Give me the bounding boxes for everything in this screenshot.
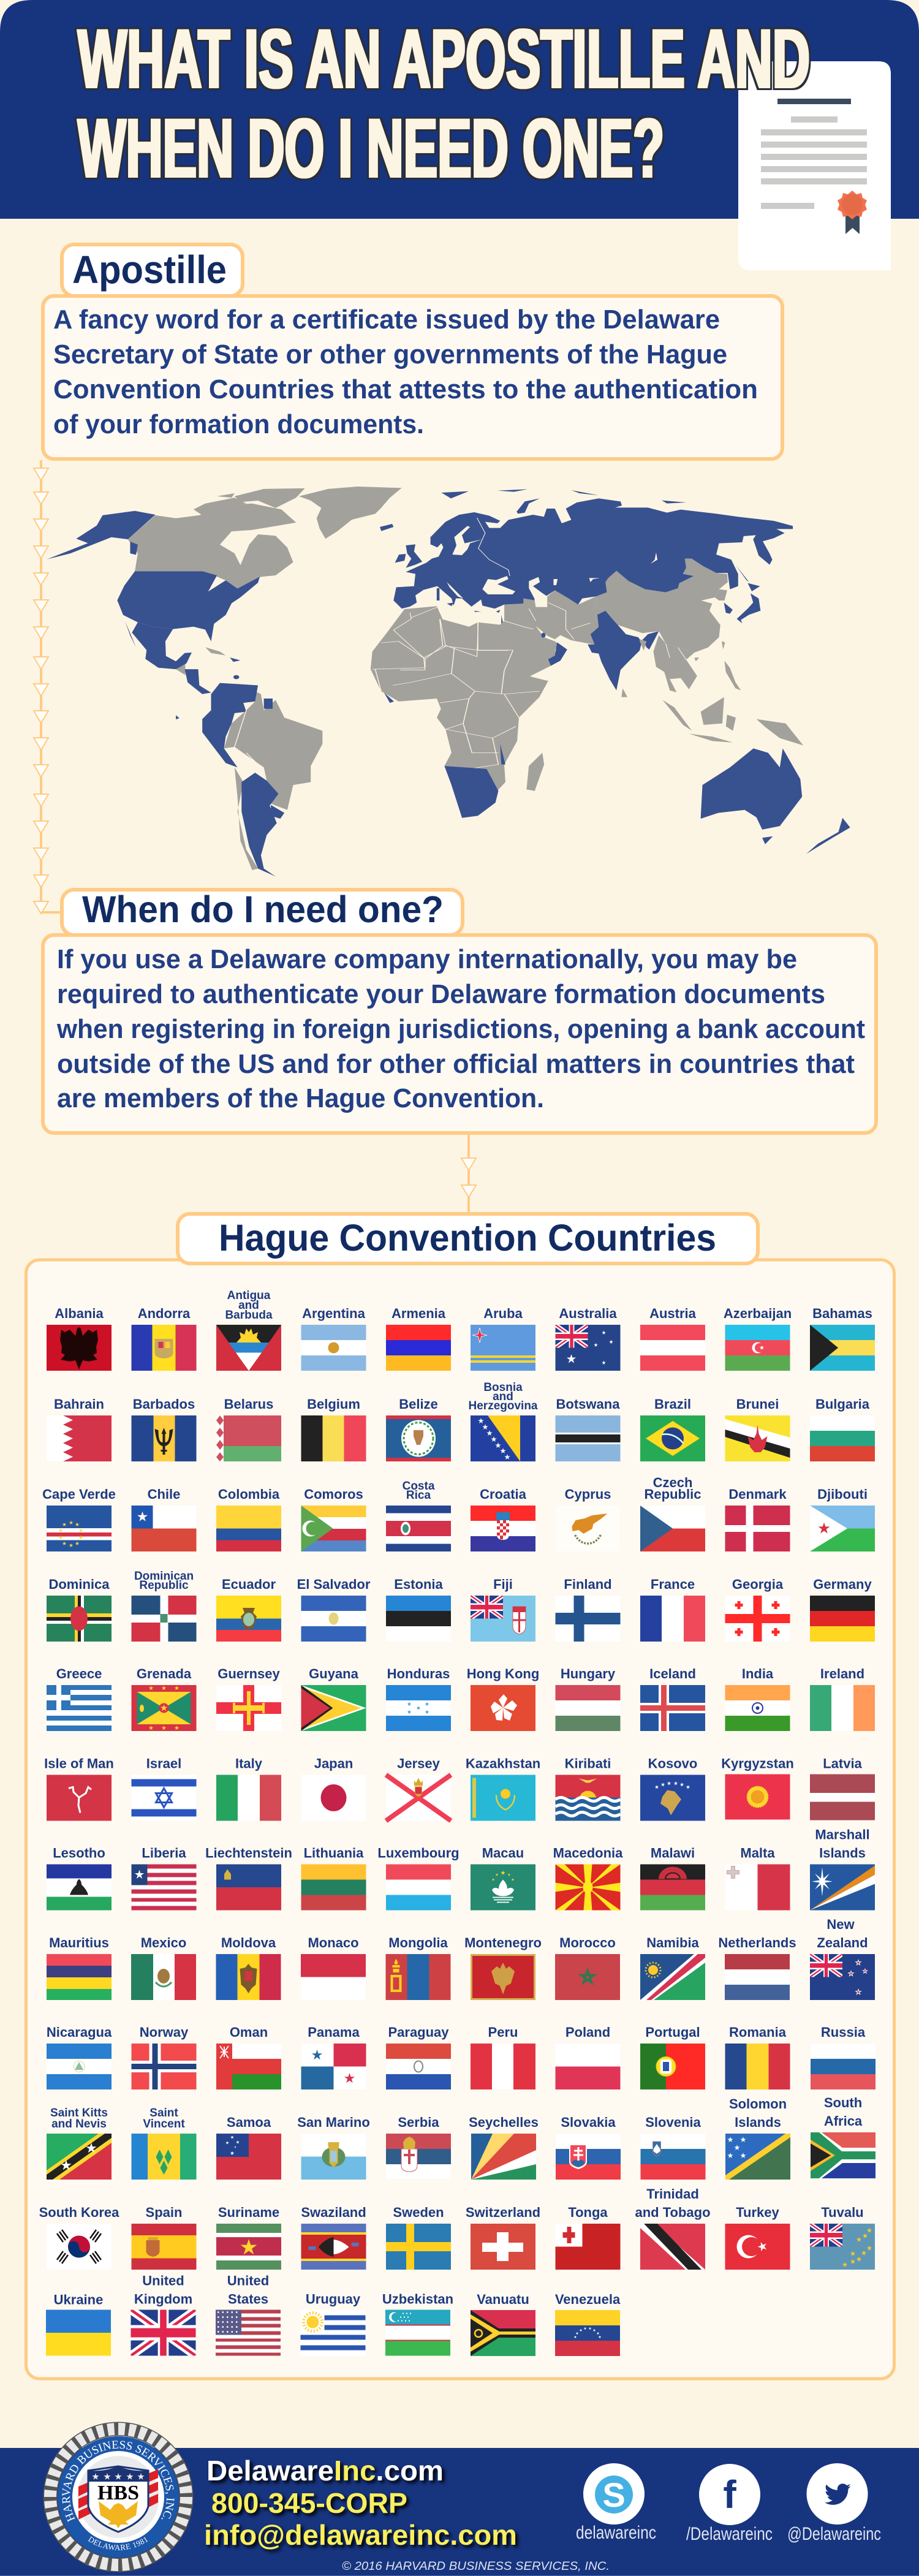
panel: when do I need one: If you use a Delaware company internationally, you may be [57,944,797,974]
flag: Aruba [471,1306,535,1371]
flag: Mexico: Mexico [141,1935,186,1950]
flag: Barbados [131,1396,196,1461]
logo: Harvard Business Services seal: HBS [97,2482,139,2504]
flag: Marshall Islands: Islands [819,1846,866,1860]
flag: Macedonia: Macedonia [553,1846,623,1860]
flag: Nicaragua: Nicaragua [47,2025,112,2040]
flag: San Marino [297,2115,370,2180]
flag: South Africa: South [824,2095,862,2110]
flag: Venezuela: Venezuela [555,2292,621,2307]
flag: Liechtenstein [205,1846,292,1911]
certificate illustration [738,61,891,270]
flag: Australia [555,1306,620,1371]
flag: Solomon Islands [725,2096,790,2180]
logo: Harvard Business Services seal: DELAWARE 1981 [88,2536,148,2550]
panel: when do I need one: outside of the US and for other official matters in countries that [57,1049,855,1079]
flag: Tonga [555,2205,620,2270]
panel: apostille definition [43,296,782,459]
flag: Argentina: Argentina [302,1306,366,1321]
flag: Belgium: Belgium [307,1396,360,1412]
flag: Paraguay: Paraguay [388,2025,449,2040]
flag: Estonia: Estonia [394,1577,443,1592]
header band [0,0,919,219]
flag: Poland [555,2025,620,2089]
flag: Swaziland [301,2205,366,2270]
flag: Morocco [555,1935,620,2000]
flag: Botswana [555,1396,620,1461]
flag: Kazakhstan [466,1756,540,1821]
flag: Malta: Malta [740,1846,775,1860]
flag: Czech Republic: Republic [645,1487,701,1502]
flag: Georgia: Georgia [732,1577,784,1592]
panel: apostille definition: of your formation documents. [53,409,424,439]
flag: Azerbaijan: Azerbaijan [724,1306,792,1321]
flag: Croatia: Croatia [480,1487,527,1502]
panel: Hague countries background [26,1260,894,2379]
flag: Moldova: Moldova [221,1935,276,1950]
flag: Bosnia and Herzegovina [469,1381,538,1461]
flag: India: India [742,1666,774,1681]
heading: Apostille: Apostille [72,248,227,292]
flag: Latvia [810,1756,875,1820]
flag: Georgia [725,1577,790,1642]
flag: Kosovo: Kosovo [648,1756,697,1771]
flag: Albania: Albania [55,1306,104,1321]
flag: Oman [216,2025,281,2089]
flag: Peru [471,2025,535,2089]
flag: Ukraine [46,2292,111,2355]
flag: Lesotho [47,1846,112,1911]
flag: Peru: Peru [488,2025,518,2040]
flag: Malta [725,1846,790,1911]
flag: Tonga: Tonga [568,2205,608,2220]
flag: Finland [555,1577,620,1642]
flag: Hungary [555,1666,620,1731]
flag: Mexico [131,1935,196,2000]
flag: Solomon Islands: Islands [735,2115,781,2130]
flag: Marshall Islands: Marshall [815,1827,870,1842]
flag: Jersey: Jersey [397,1756,441,1771]
flag: Ireland [810,1666,875,1731]
flag: Cyprus: Cyprus [565,1487,611,1502]
flag: Latvia: Latvia [823,1756,863,1771]
flag: Macedonia [553,1846,623,1911]
flag: Saint Kitts and Nevis: Saint Kitts [50,2107,108,2120]
flag: Bahamas [810,1306,875,1371]
icon: twitter [806,2463,868,2525]
flag: Austria [640,1306,705,1371]
flag: Andorra [131,1306,196,1371]
flag: Costa Rica [386,1480,451,1551]
flag: Dominica: Dominica [48,1577,110,1592]
flag: Romania: Romania [729,2025,787,2040]
flag: Hong Kong: Hong Kong [467,1666,539,1681]
title [78,12,810,195]
flag: Germany [810,1577,875,1642]
flag: Turkey [725,2205,790,2270]
flag: Switzerland [466,2205,540,2270]
flag: South Korea: South Korea [39,2205,119,2220]
flag: United States: States [228,2292,268,2306]
flag: Kyrgyzstan [721,1756,794,1820]
flag: Samoa [216,2115,281,2180]
flag: Oman: Oman [230,2025,268,2040]
flag: United States: United [227,2273,269,2288]
flag: Dominican Republic [131,1570,196,1642]
flag: New Zealand: New [826,1917,855,1932]
flag: Andorra: Andorra [138,1306,191,1321]
flag: Seychelles: Seychelles [469,2115,539,2130]
flag: Saint Vincent: Saint [149,2107,178,2120]
flag: Mauritius [47,1935,112,2000]
flag: Mongolia: Mongolia [388,1935,448,1950]
flag: Greece [47,1666,112,1731]
flag: Denmark: Denmark [728,1487,787,1502]
flag: Solomon Islands: Solomon [729,2096,787,2112]
flag: Hong Kong [467,1666,539,1731]
flag: Italy: Italy [235,1756,263,1771]
flag: Moldova [216,1935,281,2000]
flag: Brazil [640,1396,705,1461]
flag: Estonia [386,1577,451,1642]
flag: Chile [131,1487,196,1551]
flag: United Kingdom: United [142,2273,184,2288]
flag: Lithuania: Lithuania [304,1846,364,1860]
flag: Venezuela [555,2292,621,2356]
flag: Djibouti [810,1487,875,1551]
flag: Trinidad and Tobago: and Tobago [635,2205,711,2220]
flag: Saint Kitts and Nevis [47,2107,112,2180]
flag: Trinidad and Tobago [635,2186,711,2270]
flag: Portugal [640,2025,705,2089]
flag: Poland: Poland [565,2025,610,2040]
world map [47,487,850,876]
flag: Armenia [386,1306,451,1371]
logo: Harvard Business Services seal [43,2422,194,2572]
flag: Bulgaria: Bulgaria [815,1396,870,1412]
flag: Antigua and Barbuda [216,1289,281,1371]
flag: Turkey: Turkey [736,2205,780,2220]
flag: Luxembourg [377,1846,460,1911]
flag: New Zealand: Zealand [817,1935,868,1950]
flag: Ukraine: Ukraine [54,2292,103,2308]
icon: skype: S [602,2476,626,2514]
contact details: DelawareInc.com [206,2455,444,2487]
flag: Fiji [471,1577,535,1642]
flag: Suriname: Suriname [218,2205,279,2220]
flag: Macau [471,1846,535,1911]
flag: Guernsey: Guernsey [217,1666,281,1681]
flag: New Zealand [810,1917,875,2000]
flag: Costa Rica: Rica [406,1489,431,1502]
flag: Liechtenstein: Liechtenstein [205,1846,292,1860]
flag: Azerbaijan [724,1306,792,1371]
flag: Iceland: Iceland [649,1666,696,1681]
icon: facebook [699,2464,760,2525]
flag: Germany: Germany [813,1577,872,1592]
flag: Spain: Spain [146,2205,182,2220]
flag: Antigua and Barbuda: and [238,1299,259,1312]
flag: Colombia: Colombia [218,1487,280,1502]
flag: Japan: Japan [314,1756,353,1771]
panel: when do I need one [43,935,876,1133]
label: twitter handle: @Delawareinc [787,2524,881,2544]
flag: Belgium [301,1396,366,1461]
flag: Albania [47,1306,112,1371]
flag: Cape Verde: Cape Verde [42,1487,116,1502]
panel: when do I need one: are members of the Hague Convention. [57,1083,544,1113]
flag: Dominican Republic: Dominican [134,1570,194,1583]
flag: India [725,1666,790,1731]
flag: Japan [301,1756,366,1821]
flag: Honduras [386,1666,451,1731]
flag: Botswana: Botswana [556,1396,620,1412]
flag: Monaco: Monaco [308,1935,359,1950]
icon: skype [583,2463,645,2525]
flag: Israel: Israel [146,1756,181,1771]
flag: Uruguay [300,2292,365,2355]
flag: Antigua and Barbuda: Antigua [227,1289,271,1302]
flag: Macau: Macau [482,1846,524,1860]
flag: Bahamas: Bahamas [812,1306,872,1321]
flag: Serbia [386,2115,451,2179]
flag: Morocco: Morocco [559,1935,616,1950]
flag: Slovenia: Slovenia [645,2115,702,2130]
flag: Saint Vincent [131,2107,196,2180]
flag: Belize: Belize [399,1396,438,1412]
flag: Malawi: Malawi [651,1846,695,1860]
panel: apostille definition: A fancy word for a certificate issued by the Delaware [53,305,720,335]
flag: Uzbekistan [382,2292,453,2355]
flag: Ecuador [216,1577,281,1642]
flag: Comoros [301,1487,366,1551]
flag: Bulgaria [810,1396,875,1461]
flag: Paraguay [386,2025,451,2089]
flag: Tuvalu [810,2205,875,2270]
flag: Romania [725,2025,790,2089]
flag: Kazakhstan: Kazakhstan [466,1756,540,1771]
flag: Australia: Australia [559,1306,617,1321]
flag: Dominica [47,1577,112,1642]
contact details [204,2455,517,2551]
flag: Bosnia and Herzegovina: Herzegovina [469,1400,538,1412]
flag: Saint Vincent: Vincent [143,2118,185,2131]
flag: Panama [301,2025,366,2089]
flag: Austria: Austria [649,1306,697,1321]
flag: Ireland: Ireland [820,1666,864,1681]
flag: Kosovo [640,1756,705,1821]
contact details: 800-345-CORP [211,2487,407,2519]
flag: Jersey [386,1756,451,1821]
flag: Serbia: Serbia [398,2115,439,2130]
flag: Mongolia [386,1935,451,2000]
flag: Trinidad and Tobago: Trinidad [646,2186,699,2202]
flag: Ecuador: Ecuador [222,1577,276,1592]
flag: Sweden: Sweden [393,2205,444,2220]
flag: Dominican Republic: Republic [139,1579,189,1592]
flag: Guyana: Guyana [309,1666,359,1681]
flag: Spain [131,2205,196,2270]
flag: Italy [216,1756,281,1821]
flag: Grenada [131,1666,196,1731]
flag: San Marino: San Marino [297,2115,370,2130]
flag: Seychelles [469,2115,539,2180]
heading: Hague Convention Countries: Hague Convention Countries [219,1217,716,1259]
flag: Russia: Russia [821,2025,866,2040]
flag: Marshall Islands [810,1827,875,1911]
flag: Denmark [725,1487,790,1551]
flag: Barbados: Barbados [133,1396,195,1412]
flag: Belize [386,1396,451,1461]
flag: Costa Rica: Costa [403,1480,435,1493]
flag: Croatia [471,1487,535,1551]
arrow connector: left column [34,460,62,914]
flag: Netherlands: Netherlands [718,1935,796,1950]
flag: United Kingdom [131,2273,196,2355]
flag: Chile: Chile [148,1487,180,1502]
flag: Bahrain [47,1396,112,1461]
flag: Namibia [640,1935,705,2000]
flag: Slovenia [641,2115,706,2180]
flag: Isle of Man [44,1756,114,1821]
flag: Netherlands [718,1935,796,2000]
contact details: info@delawareinc.com [204,2519,517,2551]
flag: Aruba: Aruba [483,1306,523,1321]
flag: Bosnia and Herzegovina: Bosnia [483,1381,523,1394]
flag: Israel [131,1756,196,1821]
flag: Iceland [640,1666,705,1731]
flag: Norway [131,2025,196,2089]
flag: Tuvalu: Tuvalu [821,2205,864,2220]
flag: Mauritius: Mauritius [49,1935,109,1950]
flag: Bahrain: Bahrain [54,1396,104,1412]
label: facebook handle: /Delawareinc [686,2524,773,2544]
panel: when do I need one: when registering in foreign jurisdictions, opening a bank account [56,1014,865,1044]
flag: Grenada: Grenada [137,1666,192,1681]
flag: Norway: Norway [140,2025,189,2040]
flag: El Salvador [297,1577,371,1642]
flag: Isle of Man: Isle of Man [44,1756,114,1771]
flag: Monaco [301,1935,366,2000]
flag: Uruguay: Uruguay [306,2292,361,2306]
label: skype handle: delawareinc [576,2523,656,2543]
flag: Greece: Greece [56,1666,102,1681]
flag: France [640,1577,705,1642]
flag: El Salvador: El Salvador [297,1577,371,1592]
flag: Suriname [216,2205,281,2270]
flag: Fiji: Fiji [493,1577,513,1592]
flag: Hungary: Hungary [561,1666,616,1681]
copyright: © 2016 HARVARD BUSINESS SERVICES, INC. [342,2560,610,2573]
flag: Cyprus [555,1487,620,1551]
flag: Malawi [640,1846,705,1911]
flag: Sweden [386,2205,451,2270]
flag: Djibouti: Djibouti [817,1487,868,1502]
flag: Saint Kitts and Nevis: and Nevis [51,2118,107,2131]
flag: Namibia: Namibia [646,1935,700,1950]
flag: Montenegro: Montenegro [464,1935,542,1950]
flag: Antigua and Barbuda: Barbuda [225,1309,273,1322]
flag: South Africa: Africa [824,2113,863,2129]
flag: United States [216,2273,281,2355]
flag: Brunei: Brunei [736,1396,779,1412]
flag: Honduras: Honduras [387,1666,450,1681]
panel: apostille definition: Convention Countries that attests to the authentication [53,374,758,404]
flag: Guyana [301,1666,366,1731]
flag: Brunei [725,1396,790,1461]
flag: Slovakia: Slovakia [561,2115,616,2130]
flag: Liberia [131,1846,196,1911]
flag: Guernsey [216,1666,281,1731]
flag: Uzbekistan: Uzbekistan [382,2292,453,2306]
flag: Cape Verde [42,1487,116,1551]
flag: Nicaragua [47,2025,112,2089]
flag: Comoros: Comoros [304,1487,363,1502]
flag: South Korea [39,2205,119,2270]
flag: Belarus [216,1396,281,1461]
flag: Luxembourg: Luxembourg [377,1846,460,1860]
flag: France: France [651,1577,695,1592]
flag: Russia [811,2025,876,2089]
flag: Lithuania [301,1846,366,1911]
flag: Samoa: Samoa [227,2115,271,2130]
arrow connector: center [461,1134,476,1213]
flag: Switzerland: Switzerland [466,2205,540,2220]
panel: when do I need one: required to authenticate your Delaware formation documents [57,979,825,1009]
flag: Argentina [301,1306,366,1371]
flag: Armenia: Armenia [391,1306,446,1321]
heading: When do I need one?: When do I need one? [82,888,444,930]
icon: facebook: f [723,2472,736,2517]
flag: Brazil: Brazil [654,1396,691,1412]
flag: Panama: Panama [308,2025,360,2040]
flag: Swaziland: Swaziland [301,2205,366,2220]
flag: Vanuatu: Vanuatu [477,2292,529,2307]
footer band [0,2448,919,2576]
panel: apostille definition: Secretary of State or other governments of the Hague [53,339,727,369]
flag: Slovakia [556,2115,621,2180]
flag: Czech Republic: Czech [653,1475,692,1490]
logo: Harvard Business Services seal: HARVARD BUSINESS SERVICES, INC. [62,2441,174,2522]
flag: United Kingdom: Kingdom [134,2292,192,2306]
flag: Montenegro [464,1935,542,2000]
flag: South Africa [811,2095,876,2178]
flag: Vanuatu [471,2292,535,2356]
flag: Finland: Finland [564,1577,612,1592]
flag: Lesotho: Lesotho [53,1846,105,1860]
flag: Kiribati: Kiribati [565,1756,611,1771]
flag: Kyrgyzstan: Kyrgyzstan [721,1756,794,1771]
flag: Belarus: Belarus [224,1396,273,1412]
flag: Bosnia and Herzegovina: and [493,1390,513,1403]
flag: Colombia [216,1487,281,1551]
flag: Czech Republic [640,1475,705,1551]
flag: Liberia: Liberia [142,1846,186,1860]
flag: Portugal: Portugal [645,2025,700,2040]
flag: Kiribati [555,1756,620,1821]
